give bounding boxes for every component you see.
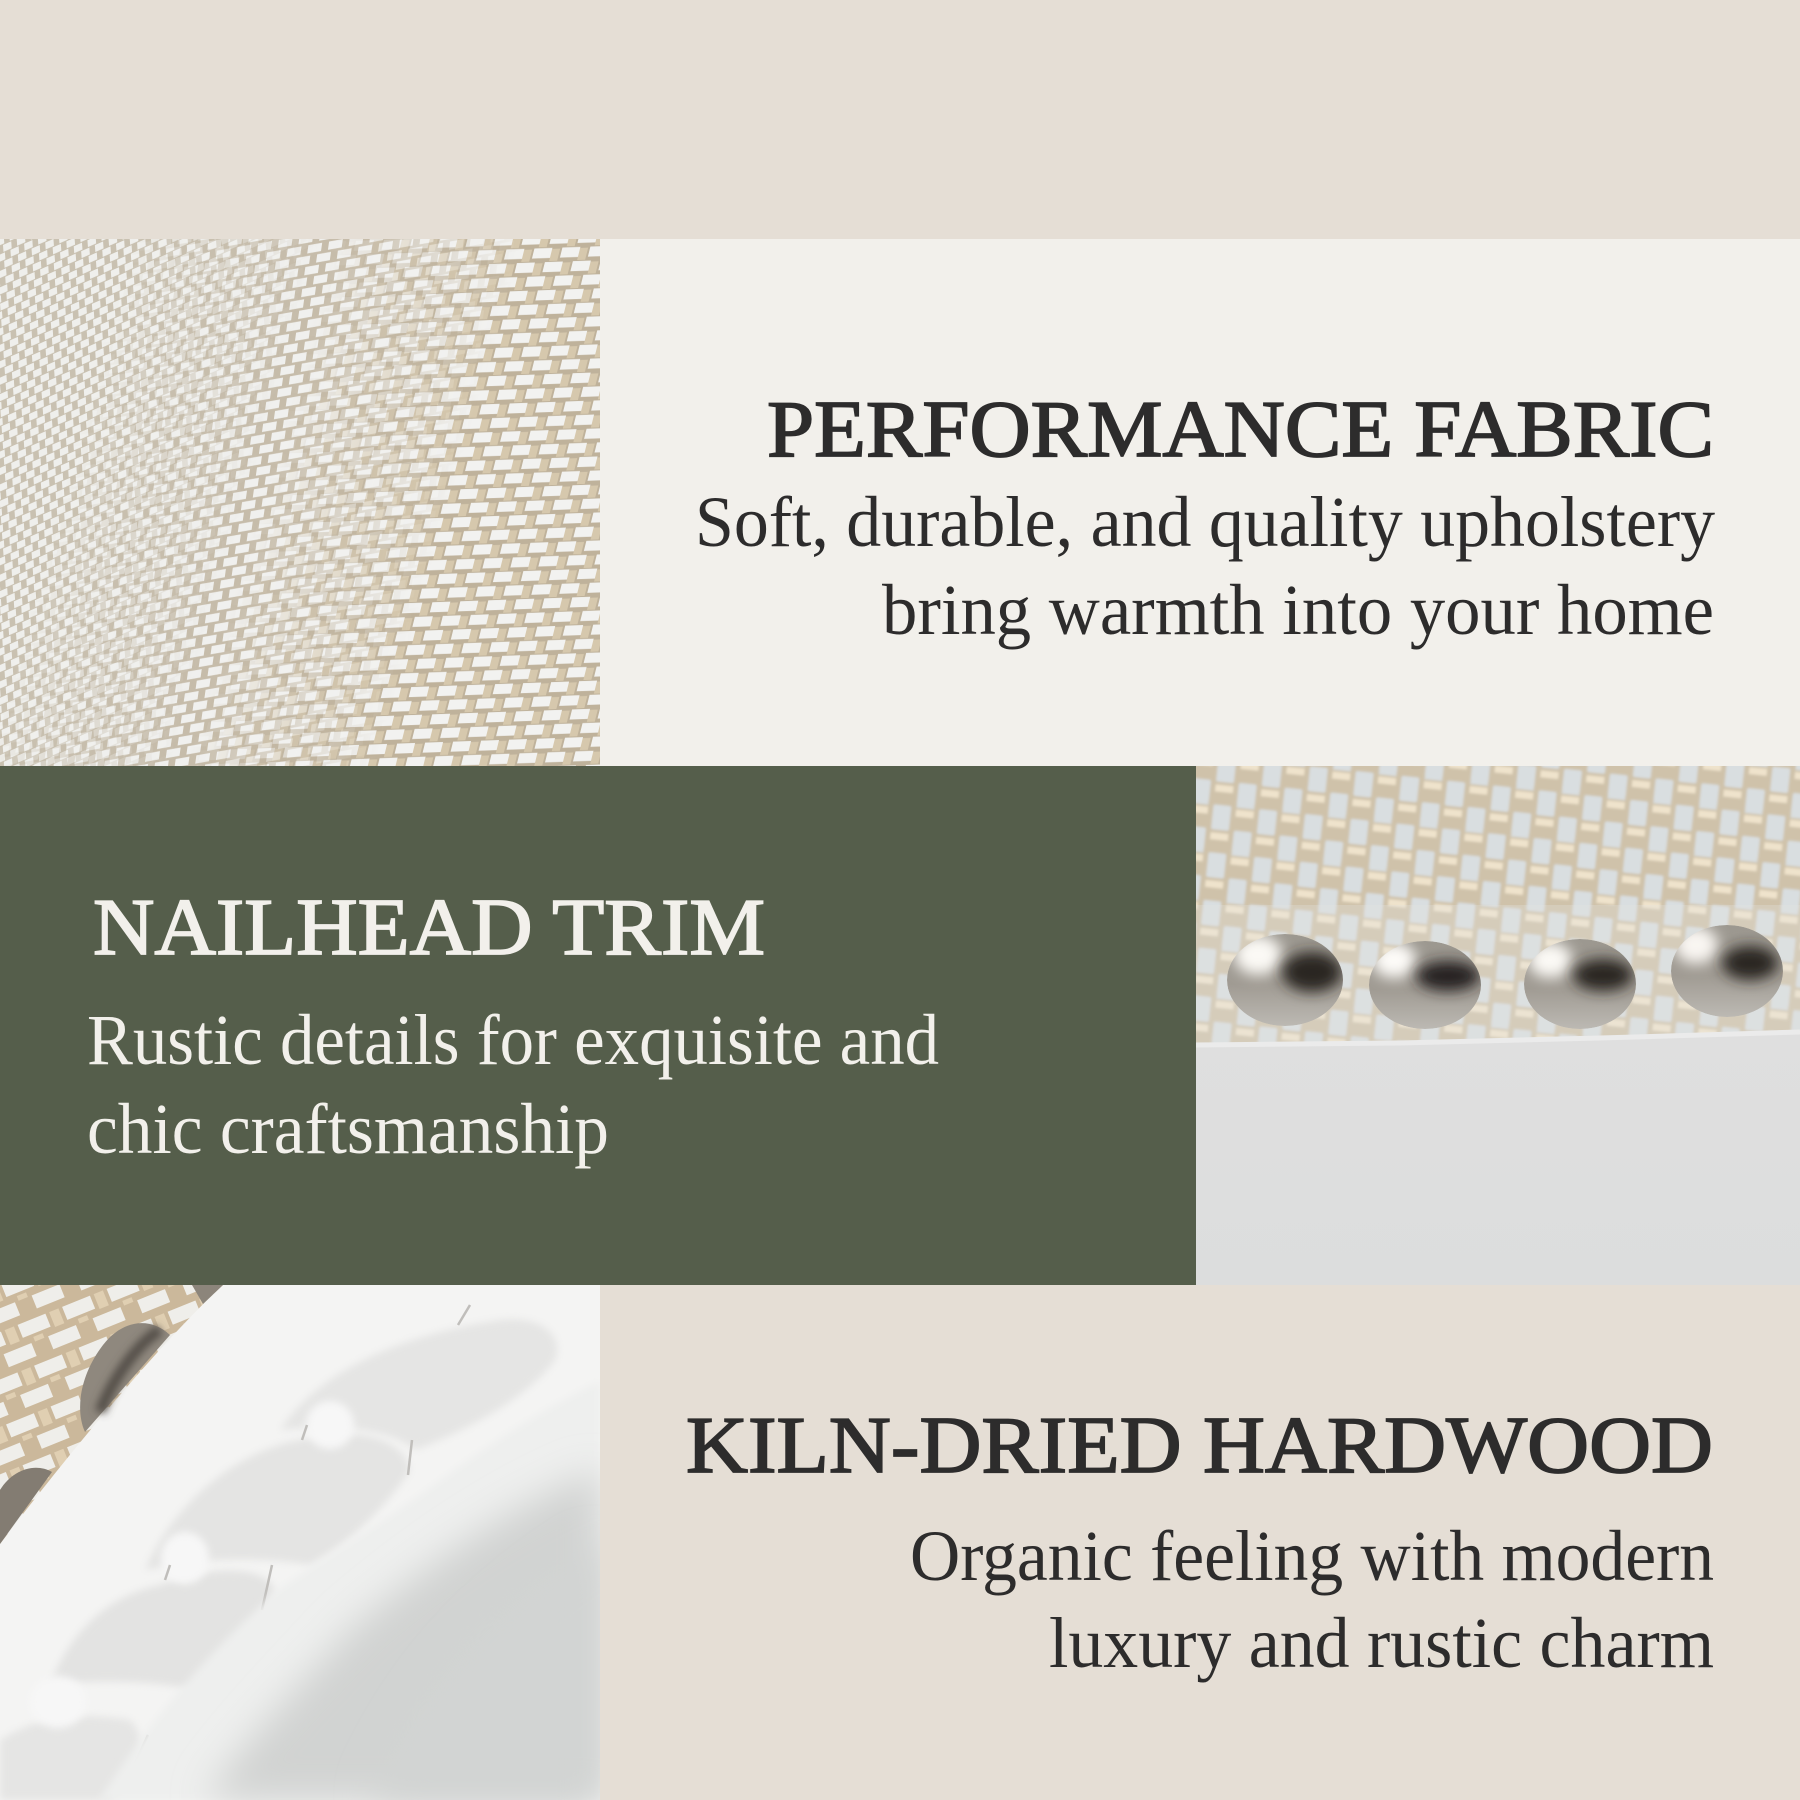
braid segment 4 bbox=[0, 1716, 140, 1800]
panel background: nailhead trim bbox=[0, 766, 1196, 1285]
heading: kiln-dried hardwood: KILN-DRIED HARDWOOD bbox=[686, 1400, 1713, 1490]
nailhead 1 bbox=[1227, 934, 1343, 1026]
panel background: kiln-dried hardwood bbox=[600, 1285, 1800, 1800]
top banner band bbox=[0, 0, 1800, 239]
fabric corner bbox=[0, 1285, 223, 1544]
white frame base bbox=[0, 1285, 600, 1800]
nailhead 4 bbox=[1671, 925, 1783, 1017]
text: performance fabric description: Soft, durable, and quality upholstery bbox=[695, 482, 1715, 562]
text: kiln-dried hardwood description: Organic feeling with modern bbox=[910, 1516, 1714, 1596]
braid segment 1 bbox=[280, 1319, 557, 1450]
heading: performance fabric: PERFORMANCE FABRIC bbox=[767, 384, 1714, 474]
text: nailhead trim description: chic craftsmanship bbox=[87, 1089, 609, 1169]
lower surface edge bbox=[109, 1596, 266, 1792]
panel: kiln-dried hardwood bbox=[0, 1285, 1800, 1800]
text: performance fabric description: bring warmth into your home bbox=[882, 570, 1714, 650]
braid creases bbox=[132, 1305, 470, 1770]
grey lower surface bbox=[205, 1470, 600, 1800]
photo: woven fabric texture bbox=[0, 239, 600, 766]
nail sliver 1 bbox=[192, 1285, 223, 1304]
text: nailhead trim description: Rustic details for exquisite and bbox=[87, 1000, 939, 1080]
text: kiln-dried hardwood description bbox=[910, 1516, 1714, 1683]
heading: nailhead trim: NAILHEAD TRIM bbox=[93, 882, 765, 972]
nail sliver 3 bbox=[0, 1468, 52, 1544]
braid segment 3 bbox=[50, 1571, 275, 1690]
photo: nailhead trim closeup bbox=[1190, 760, 1800, 1285]
text: nailhead trim description bbox=[87, 1000, 939, 1169]
braid knobs bbox=[30, 1401, 354, 1728]
nailhead 2 bbox=[1369, 941, 1481, 1029]
panel: nailhead trim bbox=[0, 760, 1800, 1285]
upholstery fabric bbox=[1190, 760, 1800, 1050]
nail sliver 2 bbox=[80, 1323, 170, 1432]
painted white wood bbox=[1196, 1032, 1800, 1285]
grey fade at right bbox=[370, 1540, 600, 1800]
panel background: performance fabric bbox=[600, 239, 1800, 766]
wood edge highlight bbox=[1196, 1032, 1800, 1045]
braid segment 2 bbox=[145, 1434, 410, 1570]
text: kiln-dried hardwood description: luxury and rustic charm bbox=[1049, 1603, 1714, 1683]
nailhead 3 bbox=[1524, 939, 1636, 1029]
text: performance fabric description bbox=[695, 482, 1715, 650]
fabric lighter border row bbox=[1196, 905, 1800, 1045]
panel: performance fabric bbox=[0, 239, 1800, 766]
photo: carved white hardwood bbox=[0, 1285, 600, 1800]
